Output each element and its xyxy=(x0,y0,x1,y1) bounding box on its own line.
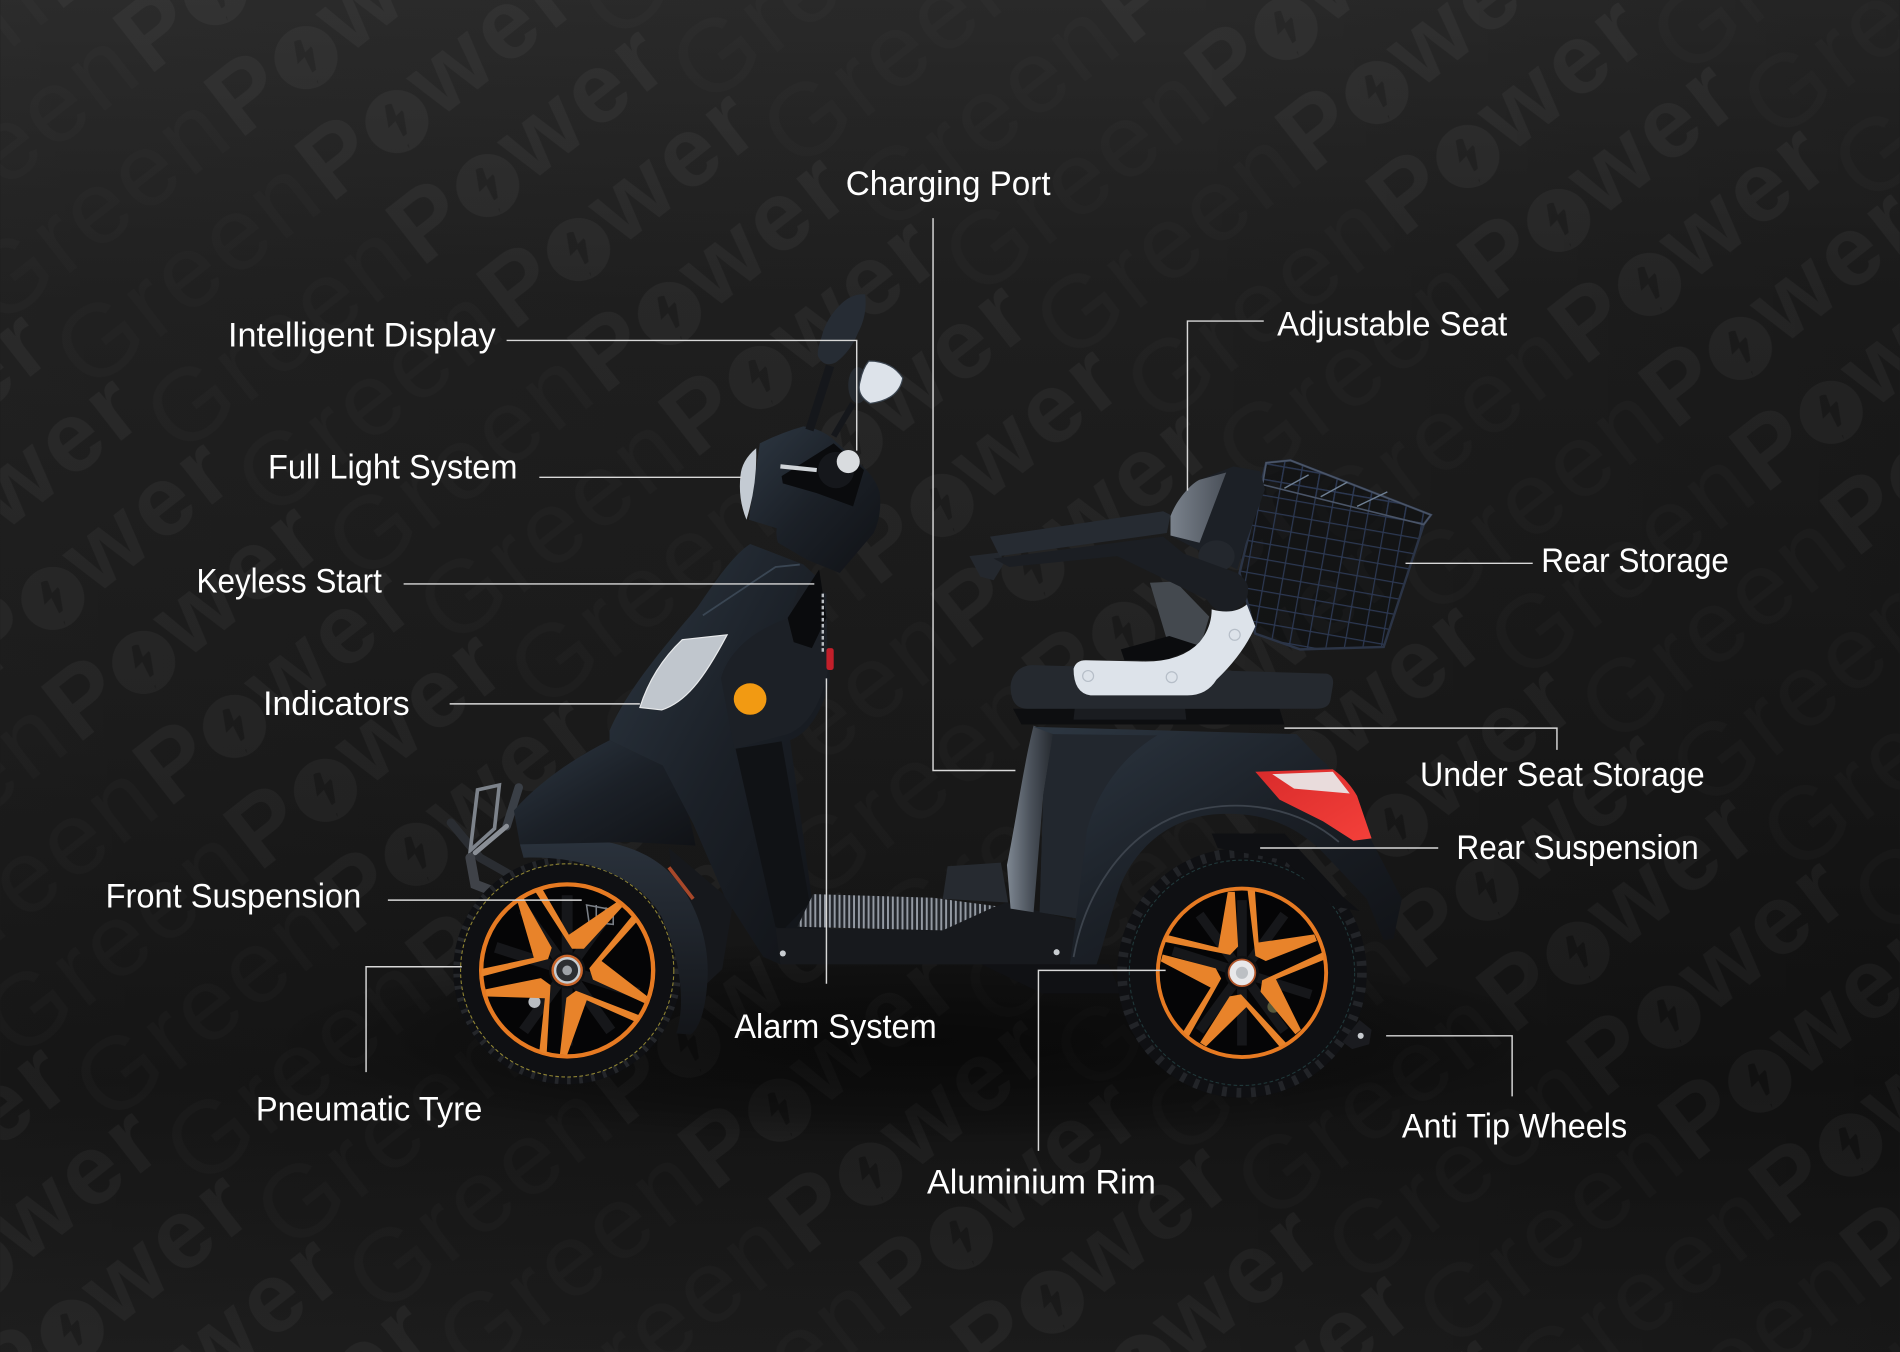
leg shield column xyxy=(610,544,836,964)
label: Intelligent Display: Intelligent Display xyxy=(228,316,496,354)
handlebar head unit xyxy=(740,426,880,573)
label: Alarm System: Alarm System xyxy=(734,1008,937,1046)
anti tip wheel xyxy=(1343,1020,1372,1049)
label: Rear Storage: Rear Storage xyxy=(1541,542,1729,580)
label: Intelligent Display xyxy=(228,316,857,451)
rear body shell xyxy=(1034,727,1402,964)
label: Under Seat Storage xyxy=(1284,728,1705,794)
front suspension and mechanics xyxy=(669,848,733,987)
label: Anti Tip Wheels xyxy=(1386,1036,1627,1146)
label: Aluminium Rim xyxy=(927,970,1166,1201)
label: Under Seat Storage: Under Seat Storage xyxy=(1420,756,1705,794)
seat base xyxy=(1013,697,1284,724)
front wheel xyxy=(453,857,681,1084)
label: Rear Suspension: Rear Suspension xyxy=(1456,829,1699,867)
seat buckle xyxy=(1121,636,1200,660)
label: Adjustable Seat xyxy=(1187,306,1508,491)
label: Pneumatic Tyre: Pneumatic Tyre xyxy=(256,1091,482,1129)
label: Pneumatic Tyre xyxy=(256,967,482,1129)
underside frame xyxy=(981,964,1121,993)
ground shadow xyxy=(267,939,1575,1145)
rear silver column xyxy=(1007,726,1053,912)
rear wheel xyxy=(1117,848,1374,1104)
label: Indicators: Indicators xyxy=(263,685,410,723)
armrest xyxy=(969,511,1248,613)
inner leg panel xyxy=(736,741,809,930)
left mirror dark xyxy=(809,294,866,430)
front basket rack xyxy=(451,785,519,890)
orange reflector xyxy=(734,683,766,715)
white seat bracket xyxy=(1074,605,1255,695)
indicator lens xyxy=(640,635,727,710)
rear storage basket xyxy=(1240,460,1431,649)
front mudguard xyxy=(520,839,708,1035)
rear wheel arch lip xyxy=(1074,806,1339,957)
tail light xyxy=(1255,769,1372,841)
right mirror white xyxy=(834,361,903,436)
storage panel on rear body xyxy=(1040,734,1157,918)
keyless start key and ignition xyxy=(788,569,834,670)
rear suspension detail xyxy=(1212,833,1359,911)
adjustable seat back xyxy=(1150,466,1265,649)
label: Keyless Start: Keyless Start xyxy=(196,562,382,600)
label: Charging Port: Charging Port xyxy=(846,165,1051,203)
label: Anti Tip Wheels: Anti Tip Wheels xyxy=(1402,1108,1627,1146)
label: Aluminium Rim: Aluminium Rim xyxy=(927,1163,1156,1201)
mobility scooter illustration xyxy=(451,294,1431,1104)
label: Adjustable Seat: Adjustable Seat xyxy=(1277,306,1508,344)
floorboard xyxy=(776,863,1076,964)
front cowl xyxy=(514,740,696,846)
label: Full Light System: Full Light System xyxy=(268,449,518,487)
seat cushion xyxy=(1011,665,1333,709)
label: Front Suspension: Front Suspension xyxy=(106,877,361,915)
label: Charging Port xyxy=(846,165,1051,770)
